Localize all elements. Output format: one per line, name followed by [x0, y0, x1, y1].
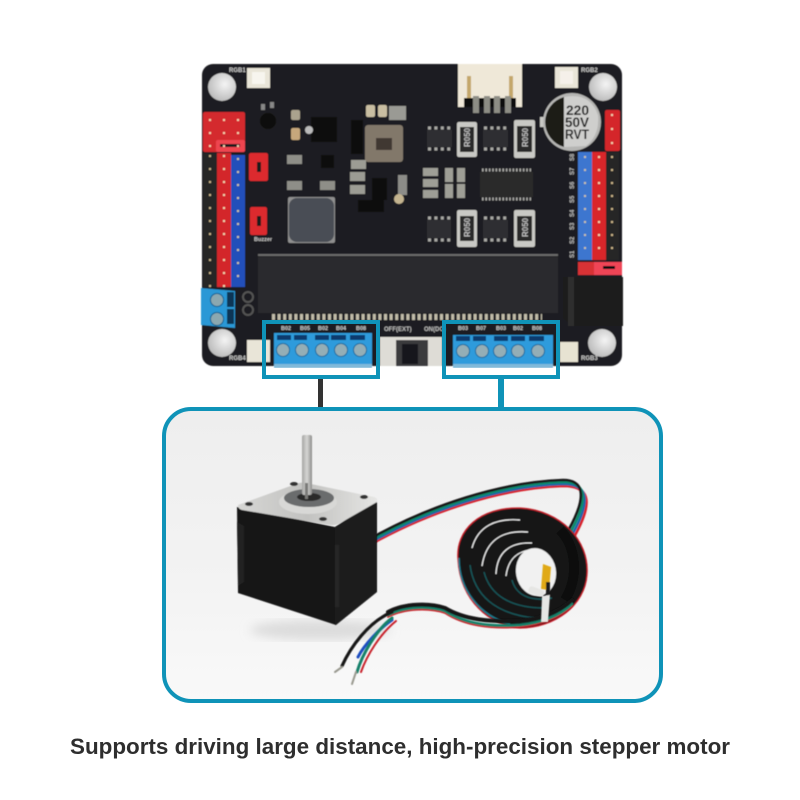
- R050 resistors: R050: [521, 127, 530, 147]
- left screw terminal: B04: [336, 326, 347, 332]
- motor shaft: [302, 435, 312, 495]
- electrolytic capacitor: 50V: [565, 114, 590, 130]
- R050 resistors: [457, 120, 535, 247]
- highlight box: left terminal: [264, 322, 378, 377]
- motor boss: [279, 490, 337, 514]
- left screw terminal: B05: [300, 326, 310, 332]
- IR receiver: [260, 102, 276, 129]
- right headers: S6: [570, 181, 576, 189]
- connector line: black wire: [318, 379, 323, 407]
- right headers: S2: [570, 236, 576, 244]
- caption: Supports driving large distance, high-precision stepper motor: [70, 734, 730, 759]
- right screw terminal: B08: [532, 326, 542, 332]
- plate screw holes: [245, 482, 368, 521]
- cable tail with stripped leads: [335, 600, 572, 684]
- right headers: [570, 110, 622, 275]
- yellow tag and zip tie: [527, 564, 551, 622]
- left screw terminal: [274, 326, 372, 368]
- small passive parts: [287, 105, 406, 190]
- electrolytic capacitor: RVT: [565, 127, 590, 142]
- right screw terminal: B03: [496, 326, 506, 332]
- right headers: S3: [570, 222, 576, 230]
- micro:bit edge slot: [258, 254, 558, 317]
- cable: motor to coil: [375, 480, 587, 542]
- motor body: [237, 499, 377, 625]
- left screw terminal: B02: [281, 326, 291, 332]
- small terminal block: [201, 288, 253, 328]
- right headers: S5: [570, 195, 576, 203]
- buzzer: [288, 197, 335, 243]
- mounting holes: [208, 73, 617, 357]
- RGB LEDs: [229, 67, 598, 362]
- R050 resistors: R050: [521, 217, 530, 237]
- right screw terminal: B07: [476, 326, 486, 332]
- RGB LEDs: RGB1: [229, 68, 246, 74]
- right headers: S7: [570, 167, 576, 175]
- slide switch: OFF(EXT): [384, 327, 412, 333]
- right headers: S4: [570, 209, 576, 217]
- RGB LEDs: RGB2: [581, 68, 598, 74]
- right screw terminal: [453, 326, 553, 368]
- RGB LEDs: RGB4: [229, 356, 246, 362]
- electrolytic capacitor: 220: [566, 102, 589, 118]
- highlight box: right terminal: [444, 322, 558, 377]
- motor top plate: [238, 483, 377, 525]
- R050 resistors: R050: [463, 217, 472, 237]
- board body: [202, 64, 622, 366]
- left jumpers: [249, 153, 273, 243]
- slide switch: [380, 327, 446, 366]
- right headers: S8: [570, 153, 576, 161]
- right screw terminal: B03: [458, 326, 468, 332]
- left screw terminal: B08: [356, 326, 366, 332]
- panel: motor photo: [164, 409, 661, 701]
- power inductor: [350, 120, 407, 212]
- left headers: [203, 112, 245, 287]
- board: [201, 64, 623, 368]
- electrolytic capacitor: [540, 93, 601, 151]
- connector line: blue wire: [498, 379, 504, 407]
- slide switch: ON(DC): [424, 327, 446, 333]
- motor shadow: [250, 620, 390, 640]
- DC jack: [563, 277, 623, 326]
- SOP chips: [427, 128, 533, 240]
- R050 resistors: R050: [463, 127, 472, 147]
- cable coil: [458, 508, 587, 628]
- small capacitors: [423, 168, 465, 198]
- left screw terminal: B02: [318, 326, 328, 332]
- right screw terminal: B02: [513, 326, 523, 332]
- stepper motor: [237, 435, 377, 625]
- right headers: S1: [570, 250, 576, 258]
- JST connector: [458, 64, 522, 113]
- left jumpers: Buzzer: [254, 237, 273, 243]
- RGB LEDs: RGB3: [581, 356, 598, 362]
